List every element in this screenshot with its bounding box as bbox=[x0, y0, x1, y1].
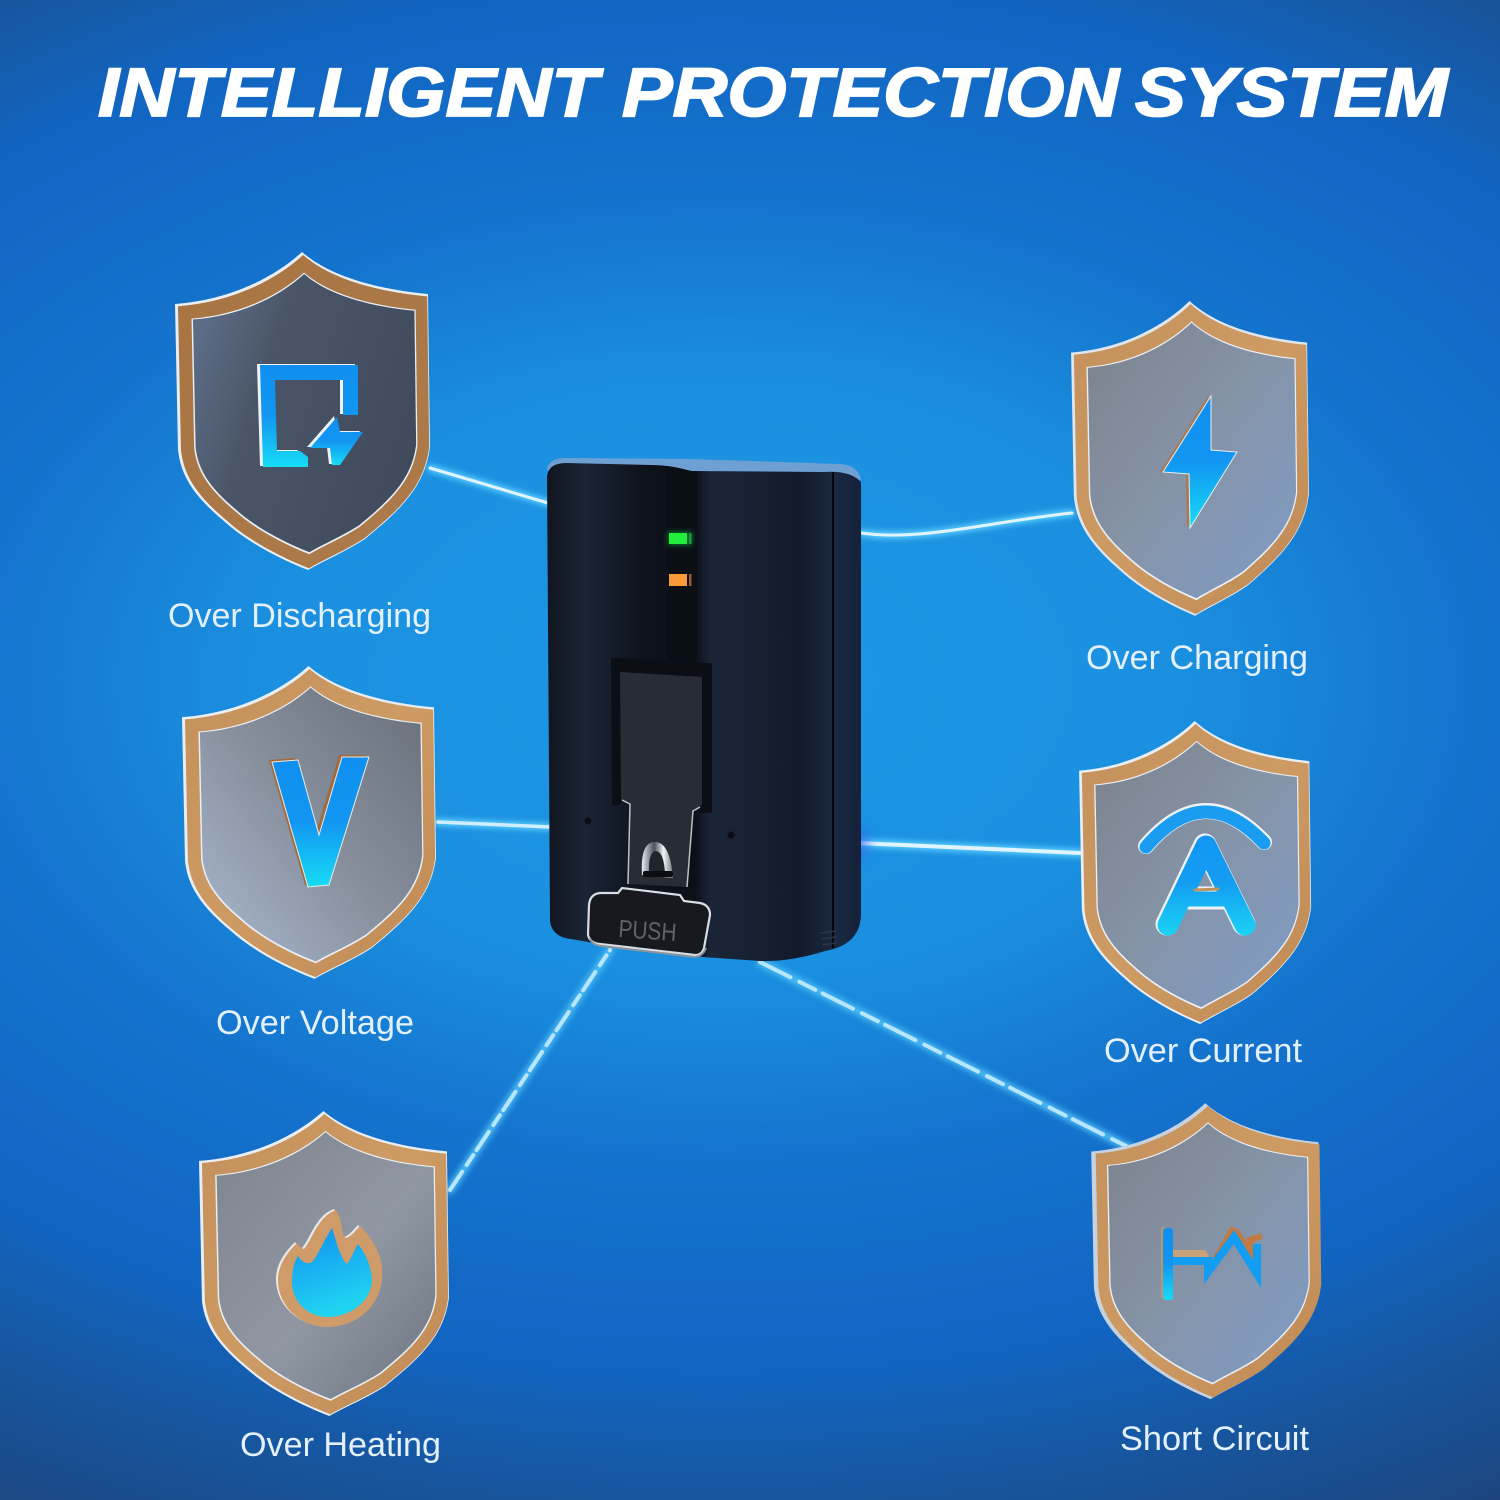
label: short circuit: Short Circuit bbox=[1120, 1420, 1310, 1458]
battery body bbox=[547, 463, 861, 961]
connector lines bbox=[430, 468, 1130, 1190]
label: over heating: Over Heating bbox=[240, 1426, 441, 1464]
line: over discharging bbox=[430, 468, 548, 503]
latch recess bbox=[611, 658, 712, 813]
icon: battery with bolt bbox=[257, 364, 363, 467]
title: INTELLIGENT bbox=[98, 54, 603, 131]
shield: over current bbox=[1079, 721, 1311, 1024]
title: PROTECTION bbox=[622, 54, 1121, 131]
shield: short circuit bbox=[1091, 1103, 1321, 1399]
orange led bbox=[669, 574, 692, 586]
screw left bbox=[584, 818, 592, 824]
icon: letter V bbox=[269, 755, 369, 887]
green led bbox=[668, 532, 692, 545]
label: over current: Over Current bbox=[1104, 1032, 1303, 1070]
led channel bbox=[667, 466, 697, 660]
battery top strip bbox=[547, 458, 861, 480]
icon: lightning bolt bbox=[1160, 396, 1237, 528]
icon: flame bbox=[276, 1209, 382, 1327]
line: over charging bbox=[862, 513, 1072, 535]
blue glow beside battery bbox=[828, 825, 868, 861]
icon: open circuit bbox=[1161, 1226, 1262, 1300]
label: over discharging: Over Discharging bbox=[168, 597, 431, 635]
battery side seam bbox=[832, 472, 834, 948]
push label: PUSH bbox=[618, 915, 677, 947]
battery bbox=[547, 458, 861, 961]
line: over current bbox=[858, 843, 1080, 853]
line: over heating bbox=[450, 950, 610, 1190]
icon: ampere bbox=[1146, 811, 1264, 925]
label: over charging: Over Charging bbox=[1086, 639, 1308, 677]
latch plate bbox=[620, 672, 702, 887]
line: short circuit bbox=[760, 962, 1130, 1148]
line: over voltage bbox=[438, 822, 550, 827]
title: SYSTEM bbox=[1135, 54, 1450, 131]
chrome latch edges bbox=[622, 800, 700, 887]
shield: over discharging bbox=[175, 252, 430, 570]
shield: over voltage bbox=[182, 666, 436, 979]
chrome hook bbox=[642, 842, 673, 878]
title bbox=[98, 54, 1450, 131]
screw right bbox=[728, 832, 734, 838]
push tab bbox=[588, 888, 710, 957]
shield: over charging bbox=[1071, 301, 1309, 616]
label: over voltage: Over Voltage bbox=[216, 1004, 414, 1042]
vent marks bbox=[820, 931, 836, 945]
shield: over heating bbox=[199, 1111, 449, 1416]
